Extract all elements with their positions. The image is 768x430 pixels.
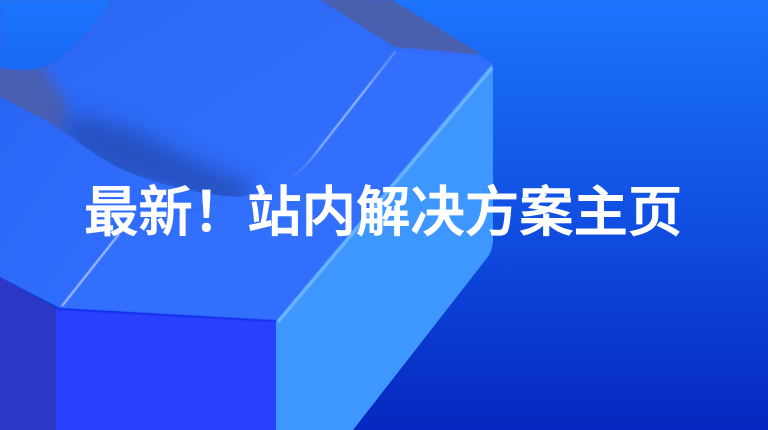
highlight: side face edge [278, 68, 492, 322]
highlight: lower crease [62, 234, 119, 306]
shadow valley [60, 112, 255, 210]
title: 最新！站内解决方案主页 [84, 182, 682, 243]
lower plane right of the crease [60, 50, 493, 321]
highlight: upper crease [285, 52, 395, 182]
block: front face top edge [58, 309, 276, 321]
background corner visible above the surface [0, 0, 113, 70]
block: light side face [276, 64, 493, 430]
grey wall at left [0, 55, 68, 135]
block: dark left face [0, 277, 56, 430]
block: front face [56, 308, 276, 430]
block: upper recessed surface [0, 0, 493, 321]
lower plane left of the crease [0, 97, 240, 308]
grey wall at upper right [320, 0, 483, 55]
